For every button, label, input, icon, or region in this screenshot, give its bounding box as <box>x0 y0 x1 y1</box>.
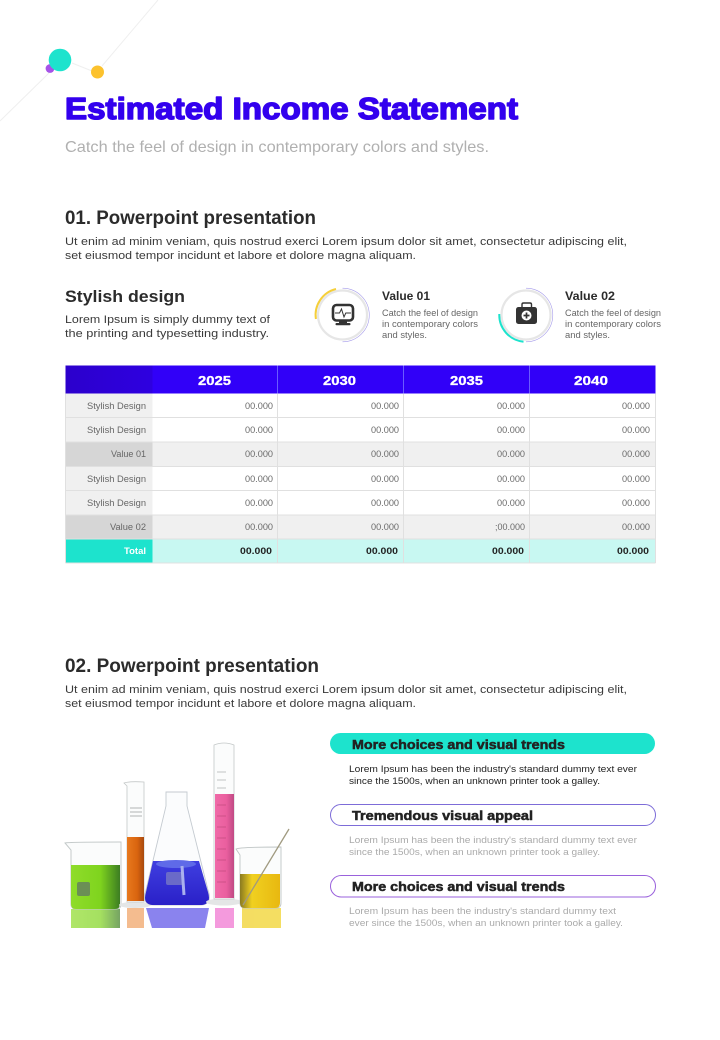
row: value 02: Value 02 <box>110 522 146 532</box>
row: value 02: 00.000 <box>622 522 650 532</box>
item 1 text <box>349 764 637 787</box>
row: stylish design 3: Stylish Design <box>87 474 146 484</box>
row: value 01: 00.000 <box>497 449 525 459</box>
value 01 text: and styles. <box>382 330 427 340</box>
row: total: 00.000 <box>366 546 398 557</box>
row: stylish design 2: 00.000 <box>371 425 399 435</box>
item 3 text: ever since the 1500s, when an unknown printer took a galley. <box>349 918 623 929</box>
stylish design block <box>65 287 271 340</box>
row: stylish design 3: 00.000 <box>245 474 273 484</box>
section 01 body text: set eiusmod tempor incidunt et labore et dolore magna aliquam. <box>65 250 416 262</box>
value 01 heading: Value 01 <box>382 289 430 303</box>
row: stylish design 1: 00.000 <box>497 401 525 411</box>
section 01 body text: Ut enim ad minim veniam, quis nostrud exerci Lorem ipsum dolor sit amet, consectetur adipiscing elit, <box>65 236 627 248</box>
row: value 01: 00.000 <box>622 449 650 459</box>
row: stylish design 3: 00.000 <box>497 474 525 484</box>
row: stylish design 3: 00.000 <box>622 474 650 484</box>
row: value 02: 00.000 <box>371 522 399 532</box>
row: stylish design 1: Stylish Design <box>87 401 146 411</box>
value 01 text: in contemporary colors <box>382 319 479 329</box>
value 02 text: and styles. <box>565 330 610 340</box>
row: value 01: 00.000 <box>371 449 399 459</box>
item 2 text <box>349 835 637 858</box>
row: stylish design 2: 00.000 <box>497 425 525 435</box>
income table <box>66 366 656 563</box>
row: stylish design 1: 00.000 <box>371 401 399 411</box>
pink cylinder <box>206 743 242 906</box>
table header: 2040 <box>574 373 608 388</box>
row: stylish design 4: 00.000 <box>497 498 525 508</box>
orange cylinder <box>119 782 151 908</box>
reflections <box>71 908 281 928</box>
blue flask <box>145 792 209 905</box>
item 2 text: Lorem Ipsum has been the industry's standard dummy text ever <box>349 835 637 846</box>
value 02 text: in contemporary colors <box>565 319 662 329</box>
bullet item 3 <box>330 876 656 929</box>
row: stylish design 4: Stylish Design <box>87 498 146 508</box>
row: value 01 <box>111 449 650 459</box>
green beaker <box>65 842 121 909</box>
row: stylish design 2: Stylish Design <box>87 425 146 435</box>
pill heading 2: Tremendous visual appeal <box>352 808 533 823</box>
row: stylish design 2 <box>87 425 650 435</box>
item 3 text <box>349 906 623 929</box>
section 02 body text: set eiusmod tempor incidunt et labore et dolore magna aliquam. <box>65 698 416 710</box>
value 01 text: Catch the feel of design <box>382 308 478 318</box>
table header: 2025 <box>198 373 231 388</box>
row: stylish design 2: 00.000 <box>622 425 650 435</box>
row: stylish design 3: 00.000 <box>371 474 399 484</box>
decorative network dots <box>0 0 158 121</box>
table header: 2035 <box>450 373 483 388</box>
pill heading 3 <box>330 876 656 897</box>
row: value 02 <box>110 522 650 532</box>
item 1 text: Lorem Ipsum has been the industry's standard dummy text ever <box>349 764 637 775</box>
section 01 heading: 01. Powerpoint presentation <box>65 208 316 229</box>
value 02 block <box>499 288 662 342</box>
section 02 body text <box>65 684 627 710</box>
item 3 text: Lorem Ipsum has been the industry's standard dummy text <box>349 906 616 917</box>
row: total: 00.000 <box>617 546 649 557</box>
row: stylish design 4: 00.000 <box>371 498 399 508</box>
pill heading 1: More choices and visual trends <box>352 737 565 752</box>
value 01 text <box>382 308 479 340</box>
row: total <box>124 546 649 557</box>
subtitle: Catch the feel of design in contemporary colors and styles. <box>65 139 489 156</box>
stylish design block: the printing and typesetting industry. <box>65 328 269 340</box>
title: Estimated Income Statement <box>65 91 518 126</box>
section 01 body text <box>65 236 627 262</box>
row: value 02: 00.000 <box>245 522 273 532</box>
value 01 block <box>316 288 479 342</box>
section 02 heading: 02. Powerpoint presentation <box>65 656 319 677</box>
pill heading 3: More choices and visual trends <box>352 879 565 894</box>
section 02 body text: Ut enim ad minim veniam, quis nostrud exerci Lorem ipsum dolor sit amet, consectetur adipiscing elit, <box>65 684 627 696</box>
row: total: 00.000 <box>240 546 272 557</box>
item 2 text: since the 1500s, when an unknown printer took a galley. <box>349 847 600 858</box>
stylish design block: Stylish design <box>65 287 185 306</box>
table row fills <box>66 394 656 563</box>
table header <box>66 366 656 394</box>
value 02 text: Catch the feel of design <box>565 308 661 318</box>
icon: medical bag ring <box>499 288 553 342</box>
bullet item 1 <box>330 733 655 787</box>
row: stylish design 4: 00.000 <box>622 498 650 508</box>
row: value 01: 00.000 <box>245 449 273 459</box>
icon: monitor ring <box>316 288 369 342</box>
row: total: 00.000 <box>492 546 524 557</box>
pill heading 2 <box>330 804 656 826</box>
row: stylish design 2: 00.000 <box>245 425 273 435</box>
row: stylish design 4 <box>87 498 650 508</box>
value 02 text <box>565 308 662 340</box>
bullet item 2 <box>330 804 656 858</box>
row: stylish design 1: 00.000 <box>245 401 273 411</box>
yellow beaker <box>236 829 289 908</box>
item 1 text: since the 1500s, when an unknown printer took a galley. <box>349 776 600 787</box>
row: value 02: ;00.000 <box>495 522 525 532</box>
row: stylish design 4: 00.000 <box>245 498 273 508</box>
row: stylish design 1 <box>87 401 650 411</box>
row: total: Total <box>124 546 146 556</box>
stylish design block: Lorem Ipsum is simply dummy text of <box>65 314 271 326</box>
table header: 2030 <box>323 373 356 388</box>
pill heading 1 <box>330 733 655 754</box>
row: stylish design 3 <box>87 474 650 484</box>
value 02 heading: Value 02 <box>565 289 615 303</box>
row: value 01: Value 01 <box>111 449 146 459</box>
illustration: laboratory glassware <box>65 743 289 928</box>
row: stylish design 1: 00.000 <box>622 401 650 411</box>
